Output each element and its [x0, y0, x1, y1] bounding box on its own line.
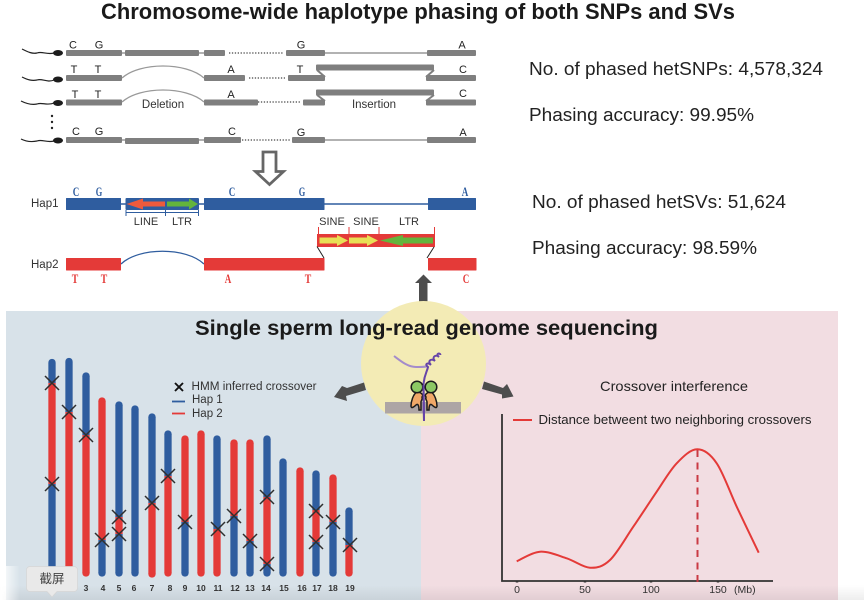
read row 3: A: [227, 89, 235, 101]
text: hetSVs stats: [532, 192, 786, 258]
chromosome bars: [52, 362, 349, 574]
red caps: [82, 397, 353, 578]
chromosome numbers: 19: [345, 583, 355, 593]
text: hetSVs stats: No. of phased hetSVs: 51,624: [532, 192, 786, 212]
bar round caps: [48, 358, 353, 577]
read row 1: A: [458, 40, 466, 52]
haplotype 1: G: [299, 184, 305, 199]
read row 1: G: [297, 40, 305, 52]
chromosome numbers: 4: [101, 583, 106, 593]
panel: sperm reads: [21, 40, 476, 144]
chromosome numbers: 14: [261, 583, 271, 593]
chromosome numbers: 9: [183, 583, 188, 593]
arrow: hollow down: [256, 152, 284, 184]
text: hetSNPs stats: Phasing accuracy: 99.95%: [529, 105, 754, 125]
axis labels: 0: [514, 584, 520, 596]
haplotype 2: Hap2: [31, 259, 58, 271]
read row 4: G: [297, 127, 305, 139]
read row 2: C: [459, 64, 467, 76]
legend: crossover map: Hap 1: [192, 394, 223, 406]
haplotype 2: T: [72, 271, 78, 286]
chart legend: [513, 419, 532, 421]
read row 3: T: [95, 89, 102, 101]
read row 2: T: [95, 64, 102, 76]
chromosome numbers: 6: [132, 583, 137, 593]
legend: crossover map: [172, 381, 317, 420]
read row 2: A: [227, 64, 235, 76]
read row 4: A: [459, 127, 467, 139]
legend: crossover map: Hap 2: [192, 408, 223, 420]
haplotype 2: LTR: [399, 216, 419, 228]
read row 3: T: [72, 89, 79, 101]
chart: crossover interference: Distance betweent two neighboring crossovers: [538, 412, 812, 427]
read row 4: C: [72, 126, 80, 138]
chromosome numbers: 12: [230, 583, 240, 593]
peak marker: [696, 450, 698, 582]
read row 4: [21, 126, 476, 144]
read row 1: [22, 40, 476, 56]
read row 3: [21, 88, 476, 111]
read row 3: Insertion: [352, 99, 396, 111]
chromosome numbers: 8: [168, 583, 173, 593]
arrow: to crossover map: [334, 382, 366, 401]
circle: sequencing: [361, 301, 486, 426]
chromosome numbers: [84, 583, 355, 593]
read row 2: T: [71, 64, 78, 76]
read row 2: [22, 64, 476, 82]
heading: crossover interference: Crossover interference: [600, 378, 748, 394]
read row 4: G: [95, 126, 103, 138]
chromosome numbers: 5: [117, 583, 122, 593]
panel: right pink background: [421, 311, 838, 600]
panel: left blue background: [6, 311, 421, 600]
haplotype 2: A: [225, 271, 232, 286]
haplotype 2: T: [101, 271, 107, 286]
tooltip: screenshot: 截屏: [39, 572, 65, 586]
curve: [517, 449, 759, 568]
crossover markers: [45, 376, 357, 571]
arrow: to interference: [482, 382, 514, 398]
haplotype 1: LINE: [134, 216, 158, 228]
haplotype 1: Hap1: [31, 198, 58, 210]
read row 1: C: [69, 40, 77, 52]
haplotype 1: [31, 184, 476, 228]
chromosome numbers: 16: [297, 583, 307, 593]
LTR arrow: [167, 198, 198, 210]
haplotype 1: G: [96, 184, 102, 199]
chromosome numbers: 10: [196, 583, 206, 593]
left screen fade: [0, 566, 20, 600]
read row 3: C: [459, 88, 467, 100]
axis labels: [514, 584, 756, 596]
chromosome numbers: 17: [312, 583, 322, 593]
axis labels: 150: [709, 584, 727, 596]
chromosome numbers: 15: [279, 583, 289, 593]
insertion element arrows: [320, 235, 433, 246]
chromosome numbers: 7: [150, 583, 155, 593]
chart: crossover interference: [502, 412, 812, 596]
axis labels: (Mb): [734, 584, 756, 596]
haplotype 2: C: [463, 271, 469, 286]
read row 1: G: [95, 40, 103, 52]
bottom screen shadow: [0, 585, 864, 600]
arrow: up: [415, 274, 432, 302]
LINE arrow: [126, 198, 165, 210]
ellipsis dots: [51, 115, 53, 129]
chromosome numbers: 13: [245, 583, 255, 593]
text: hetSNPs stats: [529, 59, 823, 125]
haplotype 1: A: [462, 184, 469, 199]
read row 4: C: [228, 126, 236, 138]
haplotype 2: SINE: [353, 216, 379, 228]
chromosome numbers: 18: [328, 583, 338, 593]
chart: chromosomes: [45, 358, 357, 593]
axis labels: 50: [579, 584, 591, 596]
axis labels: 100: [642, 584, 660, 596]
chromosome numbers: 11: [214, 583, 223, 593]
legend: crossover map: HMM inferred crossover: [192, 381, 317, 393]
text: hetSNPs stats: No. of phased hetSNPs: 4,578,324: [529, 59, 823, 79]
haplotype 2: SINE: [319, 216, 345, 228]
chromosome numbers: 3: [84, 583, 89, 593]
haplotype 1: C: [229, 184, 235, 199]
haplotype 1: C: [73, 184, 79, 199]
haplotype 2: T: [305, 271, 311, 286]
read row 2: T: [297, 64, 304, 76]
text: hetSVs stats: Phasing accuracy: 98.59%: [532, 238, 757, 258]
haplotype 2: [31, 216, 476, 286]
read row 3: Deletion: [142, 99, 184, 111]
haplotype 1: LTR: [172, 216, 192, 228]
section heading: Single sperm long-read genome sequencing: [195, 317, 658, 340]
tooltip: screenshot: [26, 566, 78, 597]
icon: nanopore: [385, 354, 461, 421]
